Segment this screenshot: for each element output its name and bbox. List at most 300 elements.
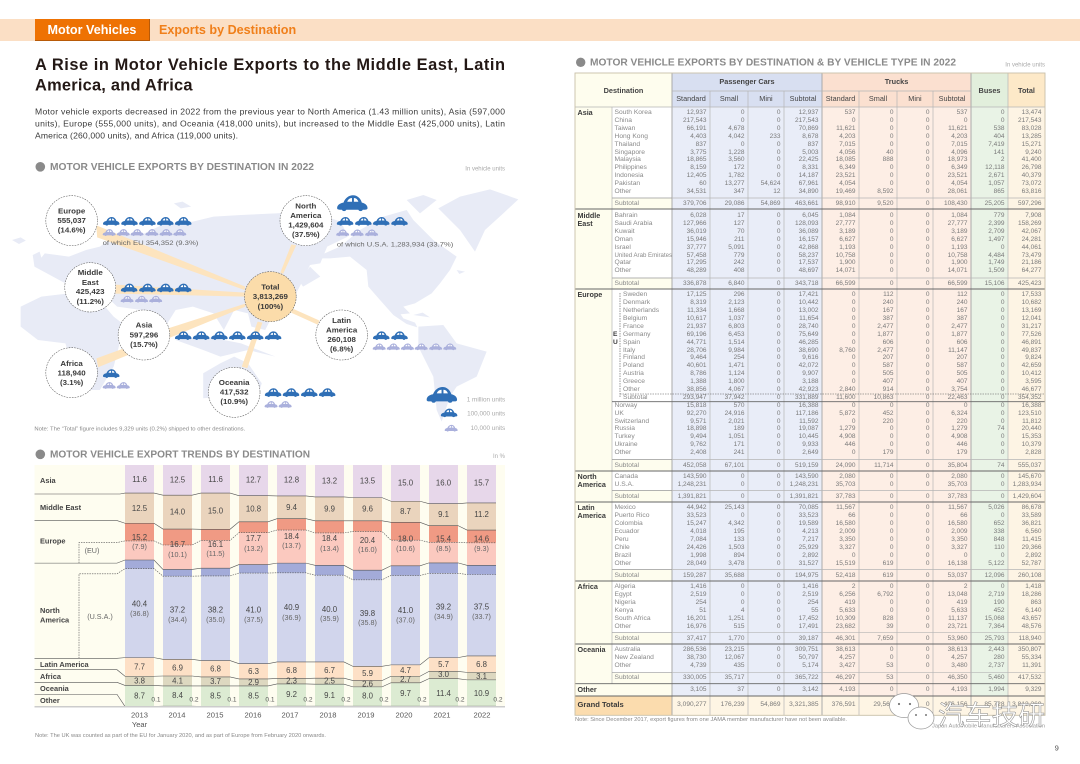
table rows: Europe: 6,803 (728, 323, 744, 330)
table rows: Europe: 11,147 (948, 347, 968, 354)
table rows: Middle East: 779 (994, 212, 1004, 219)
table rows: Latin America: 28,049 (687, 560, 706, 567)
table rows: Europe: 35,804 (948, 462, 968, 469)
table rows: Asia: 379,706 (683, 200, 706, 207)
table rows: Latin America: 4,213 (802, 528, 818, 535)
table rows: North America: 0 (1001, 481, 1004, 488)
table rows: Europe: 9,464 (690, 354, 706, 361)
map legend: 100,000 units (467, 411, 505, 417)
values 2021: 11.4 (436, 689, 451, 698)
table rows: Europe: 0 (777, 370, 780, 377)
chart row labels: Oceania (40, 684, 70, 693)
values 2013: (7.9) (132, 542, 147, 551)
table row: Grand Totals: 54,869 (760, 701, 780, 708)
table rows: Europe: 4,067 (728, 386, 744, 393)
table rows: Middle East: 24,281 (1022, 236, 1042, 243)
table rows: Latin America: Puerto Rico (614, 512, 649, 519)
table rows: Europe: 42,659 (1022, 362, 1042, 369)
values 2020: 15.0 (398, 478, 414, 488)
stacked bar chart (34, 465, 505, 729)
table rows: Europe: 1,668 (728, 307, 744, 314)
table rows: Asia: 0 (926, 200, 930, 207)
table rows: Europe: 42,923 (799, 386, 818, 393)
table rows: Asia: 23,521 (836, 172, 856, 179)
table rows: Europe: 4,908 (839, 433, 856, 440)
table rows: Africa: 2,519 (690, 591, 706, 598)
bar 2022 (467, 465, 496, 707)
table rows: Oceania: 0 (890, 654, 894, 661)
table rows: Middle East: 242 (734, 259, 744, 266)
table rows: Asia: 0 (1001, 117, 1004, 124)
table rows: Europe: 0 (852, 362, 856, 369)
heading: exports by destination (36, 161, 505, 173)
table rows: Middle East: 70 (737, 228, 744, 235)
table rows: Europe: 46,891 (1022, 339, 1042, 346)
table rows: North America: 2,080 (951, 473, 968, 480)
table rows: Middle East: 1,900 (951, 259, 968, 266)
table rows: Europe: 8,760 (839, 347, 856, 354)
table rows: Europe: 0 (777, 418, 780, 425)
table row: Other: 0 (777, 686, 780, 693)
table row: Other: 1,994 (988, 686, 1004, 693)
table rows: Africa: Nigeria (614, 599, 636, 606)
table rows: Latin America: Ecuador (614, 528, 639, 535)
values 2014: 16.7 (170, 540, 185, 549)
table rows: Europe: 0 (1001, 402, 1004, 409)
table rows: Asia: 11,621 (836, 125, 856, 132)
table rows: Europe: 38,690 (799, 347, 818, 354)
table rows: Europe: 0 (926, 291, 930, 298)
table rows: Latin America: 0 (890, 528, 894, 535)
destination: Africa: (3.1%) (60, 378, 84, 387)
table rows: Latin America: 0 (926, 520, 930, 527)
values 2019: 13.5 (360, 476, 376, 486)
chart row labels: Africa (40, 672, 62, 681)
table rows: Asia: 0 (926, 133, 930, 140)
chart row labels: Other (40, 696, 60, 705)
table rows: Europe: 0 (926, 402, 930, 409)
table rows: Asia: 0 (852, 117, 856, 124)
table rows: Latin America: 0 (777, 504, 780, 511)
table rows: Europe: 0 (926, 441, 930, 448)
table rows: Europe: Europe (578, 290, 602, 299)
year axis: 2013 (131, 710, 148, 720)
table rows: Asia: 0 (926, 141, 930, 148)
table rows: Europe: Finland (623, 354, 645, 361)
table row: Grand Totals: 3,813,269 (1012, 701, 1042, 708)
table rows: Middle East: 0 (926, 244, 930, 251)
values 2016: 8.5 (248, 692, 260, 700)
table rows: Asia: 12 (773, 188, 780, 195)
table rows: Europe: 0 (1001, 386, 1004, 393)
heading: exports by destination: In vehicle units (465, 166, 505, 172)
table rows: Europe: 0 (926, 433, 930, 440)
table rows: Asia: 83,028 (1022, 125, 1042, 132)
table rows: Middle East: Other (614, 267, 631, 274)
table rows: Europe: 446 (845, 441, 856, 448)
table rows: Latin America: 159,287 (683, 572, 706, 579)
values 2019: 5.9 (362, 669, 373, 678)
table rows: Middle East: 0 (890, 212, 894, 219)
table rows: Europe: 354,352 (1018, 394, 1042, 401)
values 2014: 12.5 (170, 476, 186, 484)
table row: Grand Totals: 176,239 (721, 701, 744, 708)
table rows: Africa: 0 (890, 583, 894, 590)
table rows: Latin America: 0 (926, 536, 930, 543)
table rows: Europe: 0 (852, 370, 856, 377)
table rows: Middle East: 66,599 (948, 280, 968, 287)
table rows: Middle East: 128,093 (795, 220, 818, 227)
table rows: Europe: 10,442 (799, 299, 818, 306)
table rows: Europe: 9,907 (802, 370, 818, 377)
table rows: Europe: 49,837 (1022, 347, 1042, 354)
table rows: Europe: 0 (1001, 331, 1004, 338)
table rows: Asia: 3,560 (728, 156, 744, 163)
table rows: Europe: 0 (1001, 394, 1004, 401)
table rows: Europe: 0 (852, 315, 856, 322)
table rows: North America: 1,248,231 (790, 481, 818, 488)
chart row labels: America (40, 616, 70, 624)
table rows: Middle East: 1,193 (839, 244, 856, 251)
table rows: Latin America: 619 (883, 572, 894, 579)
table rows: Asia: 597,296 (1018, 200, 1042, 207)
table rows: Middle East: 3,189 (839, 228, 856, 235)
table rows: Europe: 1,877 (877, 331, 894, 338)
table rows: Europe: 3,188 (802, 378, 818, 385)
values 2018 (320, 476, 351, 704)
table rows: North America: 37,783 (836, 493, 856, 500)
table rows: Asia: Hong Kong (614, 133, 648, 140)
year axis: 2020 (396, 710, 412, 720)
table rows: Africa: Africa (578, 582, 598, 591)
table rows: Europe: 0 (777, 315, 780, 322)
table rows: Latin America: 338 (994, 528, 1004, 535)
values 2020: (37.0) (396, 616, 415, 624)
values 2020: 41.0 (398, 606, 414, 615)
values 2020: (10.6) (396, 544, 415, 553)
table rows: Middle East: 10,758 (948, 252, 968, 258)
year axis: 2022 (474, 710, 490, 720)
table rows: Europe: 40,601 (687, 362, 706, 369)
table rows: Latin America: 0 (1001, 512, 1004, 519)
table rows: Asia: 0 (777, 117, 780, 124)
table rows: Europe: 0 (1001, 299, 1004, 306)
table rows: Europe: 0 (964, 402, 968, 409)
table rows: Europe: 2,649 (802, 449, 818, 456)
table rows: Africa: 2 (852, 583, 856, 590)
table: header labels: Subtotal (939, 94, 965, 103)
table rows: Europe: 241 (734, 449, 744, 456)
bar 2018 (315, 465, 344, 707)
values 2022: 11.2 (474, 510, 489, 519)
table rows: Europe: 6,453 (728, 331, 744, 338)
table: header labels: Trucks (885, 77, 908, 86)
table rows: Latin America: 11,415 (1022, 536, 1042, 543)
heading: table: MOTOR VEHICLE EXPORTS BY DESTINATION & BY VEHICLE TYPE IN 2022 (590, 57, 956, 69)
table rows: Europe: 0 (926, 386, 930, 393)
table rows: Middle East: 73,479 (1022, 252, 1042, 258)
table rows: Europe: 1,037 (728, 315, 744, 322)
table rows: Europe: Turkey (614, 433, 635, 440)
values 2017: 9.4 (286, 503, 298, 512)
table rows: Africa: 48,576 (1022, 623, 1042, 630)
map panel (12, 195, 505, 432)
table rows: Europe: 2,477 (951, 323, 968, 330)
table rows: Latin America: 3,327 (951, 544, 968, 551)
destination: Middle East: Middle (78, 268, 103, 277)
values 2021: 3.0 (438, 670, 450, 679)
table rows: Latin America: 619 (883, 560, 894, 567)
table rows: Europe: Russia (614, 425, 635, 432)
table rows: Europe: 0 (777, 331, 780, 338)
table rows: Middle East: 0 (890, 244, 894, 251)
table rows: Asia: 537 (845, 109, 856, 116)
table rows: Europe: 15,818 (687, 402, 706, 409)
table rows: Europe: 112 (957, 291, 968, 298)
table rows: Africa: 55 (811, 607, 818, 614)
table rows: Latin America: Other (614, 560, 631, 567)
table rows: Asia: 29,086 (725, 200, 744, 207)
table rows: Middle East: 17,537 (799, 259, 818, 266)
table rows: Africa: 515 (734, 623, 744, 630)
values 2017: 2.3 (286, 676, 297, 686)
table rows: Middle East: 14,071 (836, 267, 856, 274)
table rows: Asia: 7,015 (839, 141, 856, 148)
table rows: Europe: 0 (890, 441, 894, 448)
values 2017: 9.2 (286, 690, 297, 699)
table rows: Africa: 0 (926, 623, 930, 630)
table rows: Asia: 865 (994, 188, 1004, 195)
table rows: Middle East: 14,071 (948, 267, 968, 274)
table rows: Europe: Other (623, 386, 640, 393)
table rows: Europe: 0 (926, 410, 930, 417)
values 2015: 6.8 (210, 664, 221, 674)
table rows: Oceania: 38,730 (687, 654, 706, 661)
table rows: Asia: 23,521 (948, 172, 968, 179)
table rows: Africa: 2 (964, 583, 968, 590)
values 2013: 11.6 (132, 475, 147, 484)
table rows: Europe: 2,828 (1025, 449, 1042, 456)
destination: Europe: (14.6%) (58, 226, 86, 234)
intro paragraph: Motor vehicle exports decreased in 2022 from the previous year to North America (1.43 million units), Asia (597,000 (35, 107, 505, 117)
table rows: Europe (578, 290, 1042, 469)
table rows: Europe: 0 (852, 418, 856, 425)
table rows: Latin America: 1,998 (690, 552, 706, 559)
table rows: North America: 2,080 (839, 473, 856, 480)
destination: Europe: 555,037 (57, 216, 86, 225)
table rows: Middle East: 0 (777, 228, 780, 235)
table rows: Middle East: 1,509 (988, 267, 1004, 274)
table rows: Middle East: United Arab Emirates (614, 252, 672, 258)
table rows: Africa: Egypt (614, 591, 632, 598)
table rows: Latin America: 652 (994, 520, 1004, 527)
table rows: Asia: Pakistan (614, 180, 640, 187)
values 2015: 16.1 (208, 540, 223, 549)
destination: Europe: Europe (58, 207, 86, 215)
table rows: Europe: 1,279 (951, 425, 968, 432)
destination: Middle East: (11.2%) (77, 297, 104, 306)
segment connector lines (34, 493, 496, 706)
table rows: Asia: 60 (699, 180, 706, 187)
table rows: Africa (578, 582, 1042, 642)
destination: Latin America: 260,108 (327, 335, 357, 344)
table rows: North America: 0 (1001, 493, 1004, 500)
table rows: Asia: Malaysia (614, 156, 641, 163)
table rows: Europe: 207 (883, 354, 894, 361)
table rows: Europe: 0 (1001, 347, 1004, 354)
table rows: Europe: 179 (957, 449, 968, 456)
table rows: North America: 0 (926, 473, 930, 480)
table rows: Middle East: 5,091 (728, 244, 744, 251)
table rows: Europe: 0 (1001, 410, 1004, 417)
table rows: Middle East: 0 (926, 267, 930, 274)
table rows: Latin America: 19,589 (799, 520, 818, 527)
table rows: Africa: 4 (741, 607, 744, 614)
values 2021: 15.4 (436, 534, 452, 544)
table: header labels: Subtotal (790, 94, 816, 103)
table rows: Asia: 18,865 (687, 156, 706, 163)
table rows: Asia: 73,072 (1022, 180, 1042, 187)
destination: Middle East (65, 263, 191, 312)
table rows: Africa: 0 (926, 635, 930, 642)
table rows: Oceania: 50,797 (799, 654, 818, 661)
table rows: Latin America: 3,350 (951, 536, 968, 543)
table rows: Asia: 8,331 (802, 164, 818, 171)
table rows: Middle East: 7,908 (1025, 212, 1042, 219)
table rows: Middle East: Saudi Arabia (614, 220, 652, 227)
table rows: Africa: 0 (890, 607, 894, 614)
values 2020: 18.0 (398, 534, 414, 544)
table rows: Africa: 254 (696, 599, 706, 606)
table rows: Europe: 24,916 (725, 410, 744, 417)
table rows: Africa: 254 (808, 599, 818, 606)
table rows: Latin America: 5,122 (988, 560, 1004, 567)
table rows: Middle East: 0 (890, 280, 894, 287)
table rows: Latin America: 0 (852, 552, 856, 559)
values 2021: (34.9) (434, 612, 453, 621)
table rows: North America: Canada (614, 473, 638, 480)
table rows: Middle East: Middle (578, 211, 600, 220)
table rows: Europe: Ukraine (614, 441, 638, 448)
table rows: Asia: 217,543 (1018, 117, 1042, 124)
table rows: North America: 0 (777, 481, 780, 488)
table row: Other: 3,105 (690, 686, 706, 693)
table rows: North America: 1,391,821 (790, 493, 818, 500)
table rows: Africa: 828 (883, 615, 894, 622)
table rows: Europe: 587 (883, 362, 894, 369)
table rows: Europe: 0 (1001, 354, 1004, 361)
table rows: Africa: 16,976 (687, 623, 706, 630)
destination: North America (280, 195, 453, 248)
table rows: Africa: 39,187 (799, 635, 818, 642)
table rows: Latin America: 25,143 (725, 504, 744, 511)
table rows: Asia: 108,430 (944, 200, 968, 207)
table rows: Asia: 217,543 (683, 117, 706, 124)
table rows: Oceania (578, 645, 1042, 681)
table rows: Africa: 0 (741, 583, 744, 590)
table rows: Asia: Other (614, 188, 631, 195)
table rows: Asia: 40 (886, 148, 894, 156)
destination: Europe: of which EU 354,352 (9.3%) (103, 240, 198, 247)
table rows: Latin America: America (578, 511, 606, 520)
table rows: Middle East: 37,777 (687, 244, 706, 251)
table rows: Middle East: 10,758 (836, 252, 856, 258)
table rows: Europe: 0 (1001, 370, 1004, 377)
table rows: Asia: 538 (994, 125, 1004, 132)
table rows: North America: 1,248,231 (678, 481, 706, 488)
values 2018: 9.9 (324, 504, 335, 514)
table rows: Middle East: 343,718 (795, 280, 818, 287)
table rows: Europe: 0 (777, 425, 780, 432)
table rows: Middle East: 48,697 (799, 267, 818, 274)
year axis: 2017 (282, 710, 298, 720)
table rows: North America: 1,283,934 (1013, 481, 1042, 488)
table rows: Latin America: 2,892 (1025, 552, 1042, 559)
table rows: Middle East: 17,295 (687, 259, 706, 266)
table rows: Asia: 13,474 (1022, 109, 1042, 116)
table rows: Asia: 28,061 (948, 188, 968, 195)
table rows: Middle East: 0 (777, 280, 780, 287)
table rows: Latin America: 66 (960, 512, 968, 519)
table rows: Africa: 1,418 (1025, 583, 1042, 590)
table rows: Middle East: 0 (926, 220, 930, 227)
table rows: Asia: 22,425 (799, 156, 818, 163)
table rows: Asia: 6,349 (839, 164, 856, 171)
table rows: Europe: 9,494 (690, 433, 706, 440)
table rows: Asia: 2,671 (988, 172, 1004, 179)
heading: exports by destination: MOTOR VEHICLE EXPORTS BY DESTINATION IN 2022 (50, 161, 314, 173)
table rows: Asia: 15,271 (1022, 141, 1042, 148)
table rows: Latin America: 194,975 (795, 572, 818, 579)
table rows: Europe: 1,877 (951, 331, 968, 338)
table row: Other: 37 (737, 686, 744, 693)
table rows: Asia: 41,400 (1022, 156, 1042, 163)
total circle (245, 272, 296, 322)
table rows: Latin America: 7,084 (690, 536, 706, 543)
table rows: Oceania: 365,722 (795, 674, 818, 681)
table rows: Europe: 10,445 (799, 433, 818, 440)
table rows: Europe: 2,408 (690, 449, 706, 456)
table rows: Asia: 8,678 (802, 133, 818, 140)
title (35, 56, 505, 95)
values 2018: (35.9) (320, 614, 339, 623)
table rows: Oceania: 38,613 (948, 646, 968, 653)
values 2022: (9.3) (474, 544, 489, 553)
table rows: Latin America: 15,519 (836, 560, 856, 567)
table rows: Europe: 13,169 (1022, 307, 1042, 314)
table rows: Latin America: 24,426 (687, 544, 706, 551)
table rows: Asia: 12,937 (799, 109, 818, 116)
table rows: Africa: 53,960 (948, 635, 968, 642)
table rows: Europe: 67,101 (725, 462, 744, 469)
table rows: Europe: 123,510 (1018, 410, 1042, 417)
table rows: Asia: 217,543 (795, 117, 818, 124)
table rows: Latin America: 0 (926, 560, 930, 567)
table rows: Oceania: 53 (886, 662, 894, 669)
table rows: Europe: 0 (926, 449, 930, 456)
values 2016: 17.7 (246, 534, 261, 543)
table rows: Latin America: 2,009 (839, 528, 856, 535)
table rows: Middle East: 1,193 (951, 244, 968, 251)
table rows: Middle East: 0 (926, 259, 930, 266)
table rows: Europe: Italy (623, 347, 635, 354)
table rows: Europe: 0 (926, 378, 930, 385)
values 2022: (33.7) (472, 612, 491, 621)
table rows: Latin America: 7,217 (802, 536, 818, 543)
table rows: Europe: 0 (777, 291, 780, 298)
table rows: Latin America: Mexico (614, 504, 636, 511)
values 2018: 6.7 (324, 666, 335, 675)
